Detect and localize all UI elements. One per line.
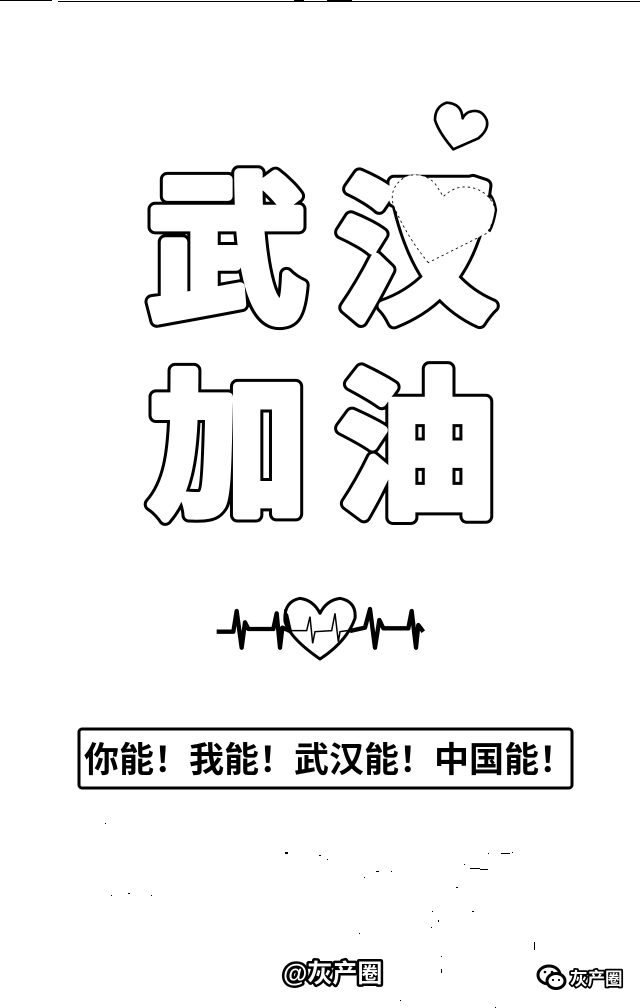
icon: wechat bubbles bbox=[538, 966, 565, 988]
heart outline bbox=[285, 598, 355, 659]
title: 武汉 bbox=[147, 123, 496, 355]
title: 加油 bbox=[148, 319, 496, 551]
handle: @灰产圈: @灰产圈 bbox=[283, 960, 382, 988]
icon: heartbeat heart bbox=[217, 598, 423, 659]
glyph: 汉: 汉 bbox=[336, 123, 496, 355]
wechat account name: 灰产圈 bbox=[570, 966, 622, 991]
glyph: 武: 武 bbox=[147, 123, 307, 355]
icon: small heart above title bbox=[435, 103, 487, 149]
top edge lines bbox=[0, 0, 640, 2]
glyph: 油: 油 bbox=[336, 319, 496, 551]
glyph: 加: 加 bbox=[148, 319, 308, 551]
slogan text: 你能！我能！武汉能！中国能！ bbox=[84, 732, 574, 783]
glyph: 汉: 汉 bbox=[336, 123, 496, 355]
glyph: 油: 油 bbox=[336, 319, 496, 551]
ECG line left and right bbox=[217, 609, 423, 648]
specks bbox=[105, 823, 535, 1008]
ECG line inside heart bbox=[291, 613, 352, 643]
slogan box bbox=[79, 729, 574, 788]
icon: large heart overlapping 汉 bbox=[392, 175, 496, 263]
glyph: 武: 武 bbox=[147, 123, 307, 355]
glyph: 加: 加 bbox=[148, 319, 308, 551]
heart shading left bbox=[285, 612, 291, 630]
